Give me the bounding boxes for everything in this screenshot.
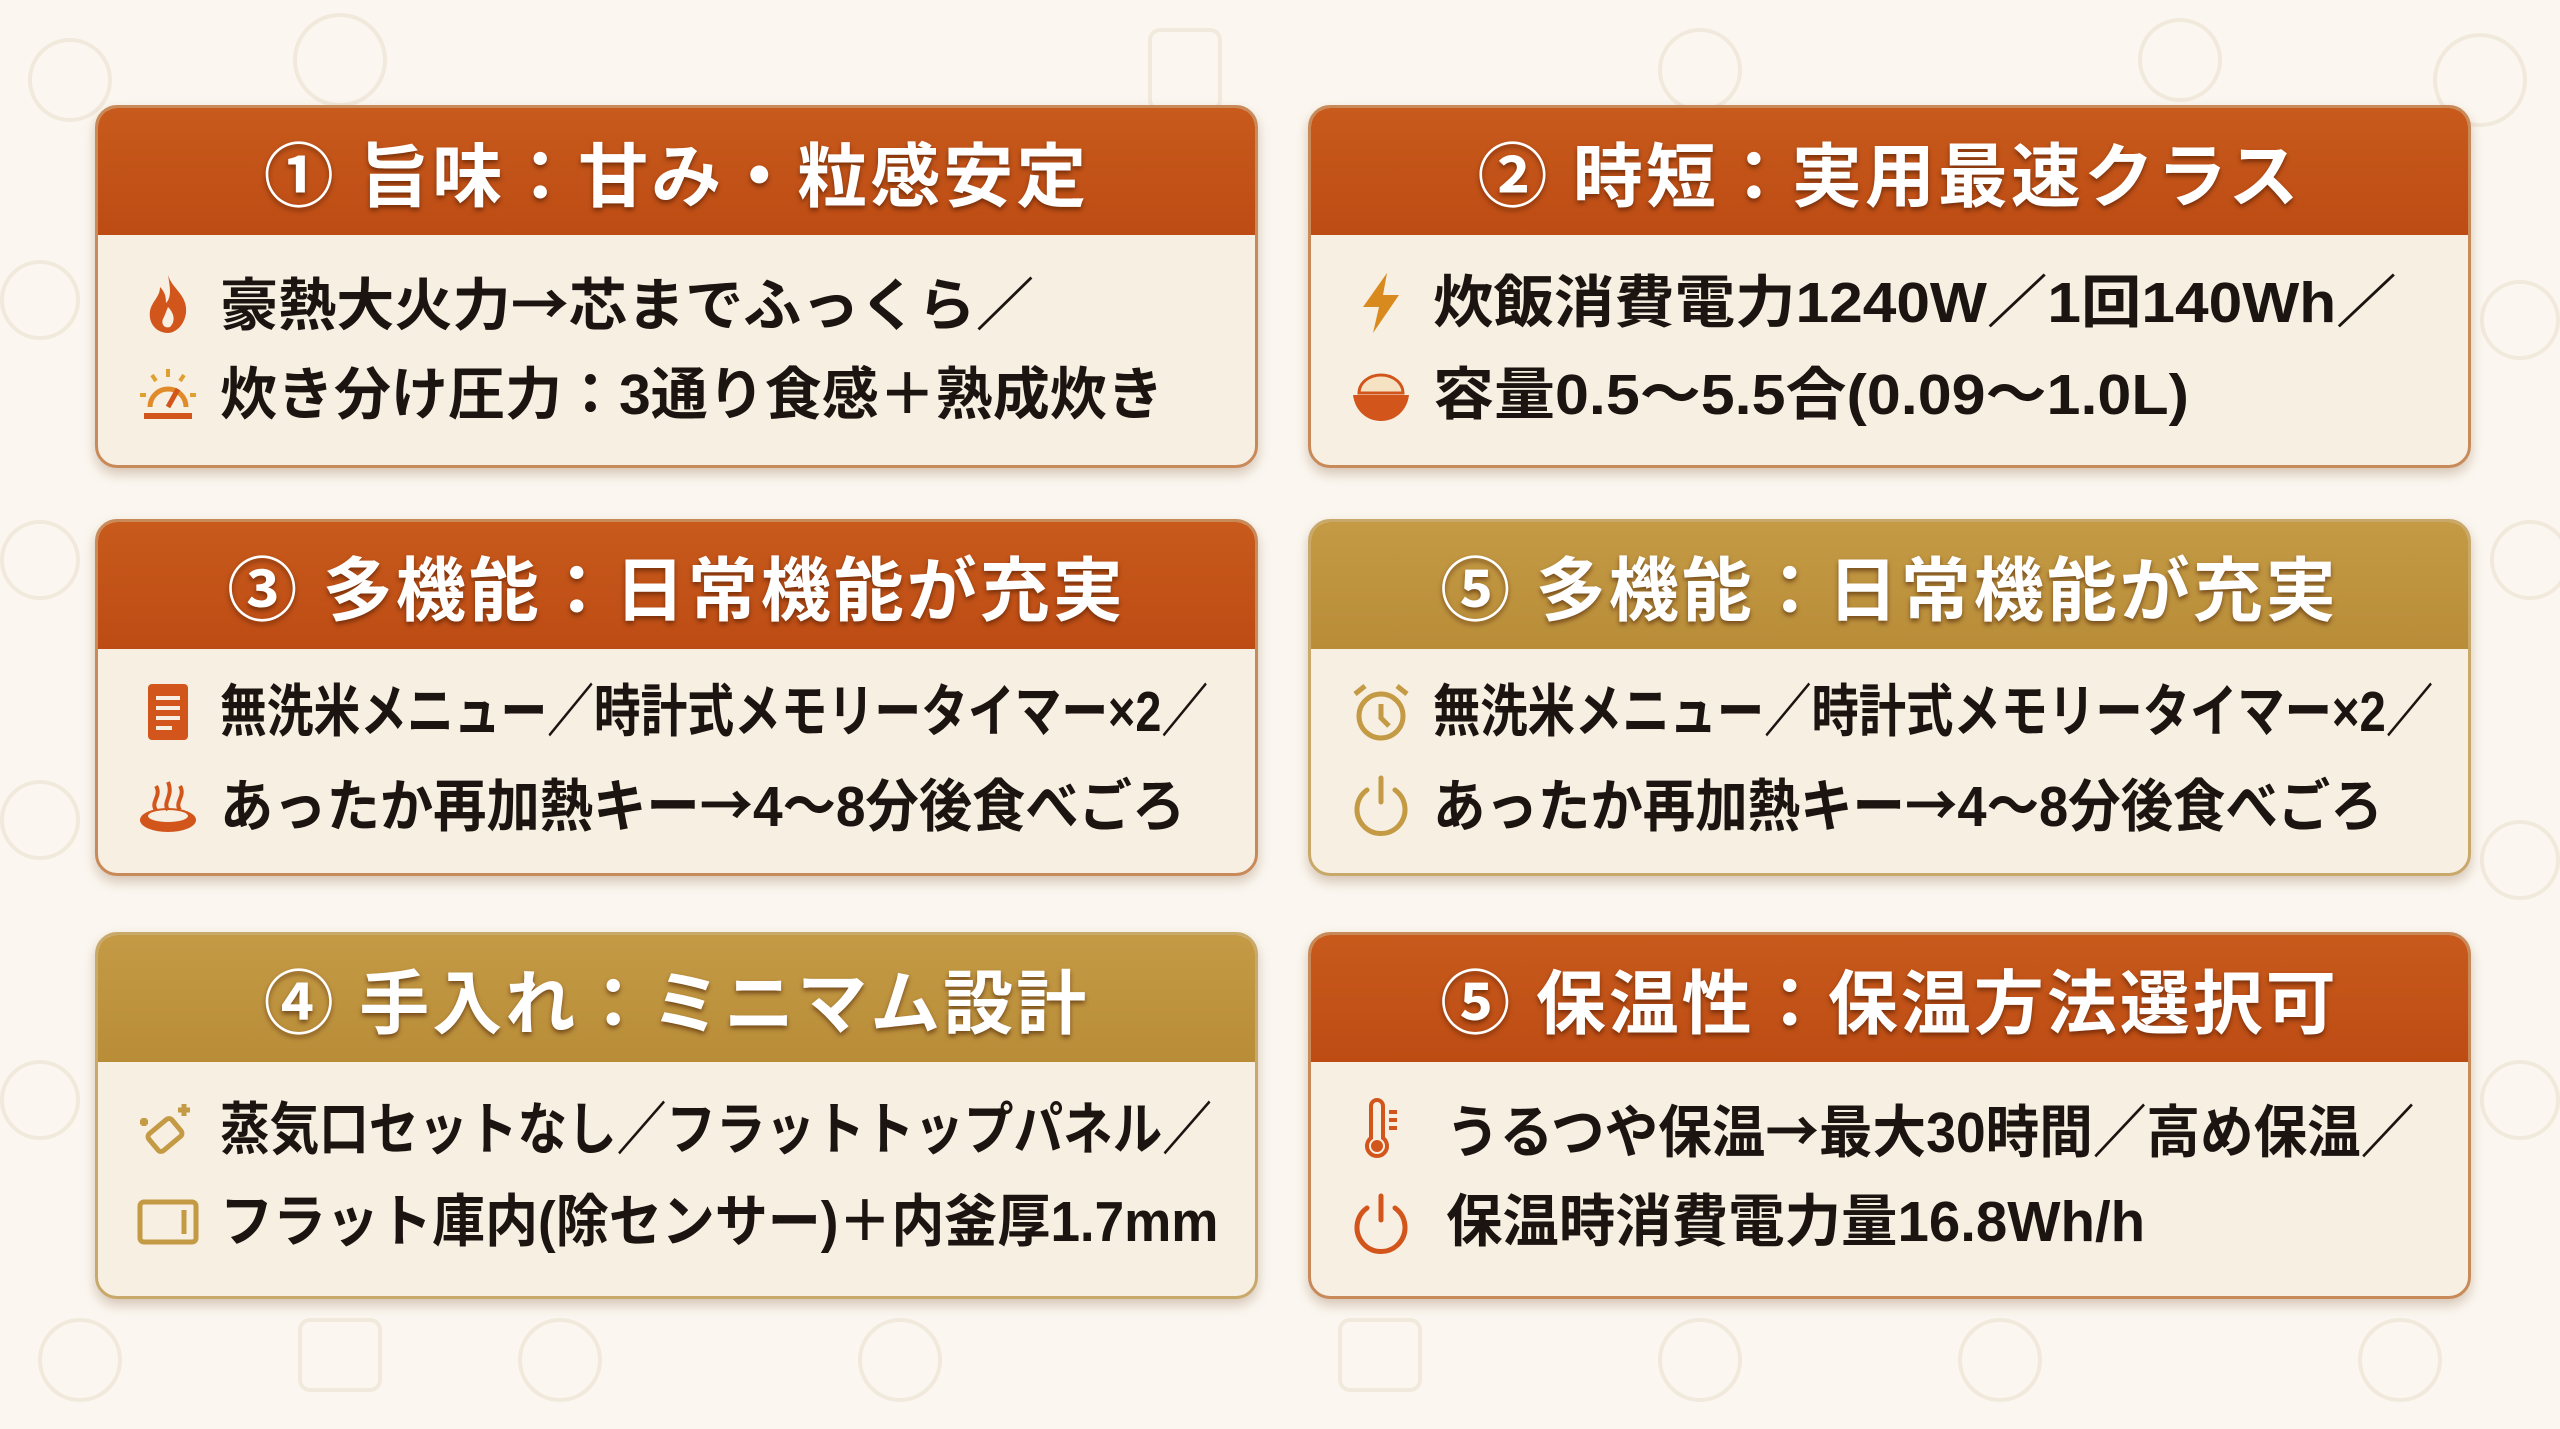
line 4-1: 無洗米メニュー／時計式メモリータイマー×2／ xyxy=(1433,680,2433,744)
line 5-2: フラット庫内(除センサー)＋内釜厚1.7mm xyxy=(220,1190,1218,1254)
panel 2 xyxy=(1308,105,2471,468)
line 3-1: 無洗米メニュー／時計式メモリータイマー×2／ xyxy=(220,680,1208,744)
line 2-2: 容量0.5～5.5合(0.09～1.0L) xyxy=(1433,363,2189,427)
heading 4: ⑤ 多機能：日常機能が充実 xyxy=(1440,552,2339,630)
panel 6 xyxy=(1308,932,2471,1299)
panel 3 xyxy=(95,519,1258,876)
line 1-1: 豪熱大火力→芯までふっくら／ xyxy=(220,260,1034,342)
heading 6 xyxy=(1311,935,2468,1062)
line 5-1: 蒸気口セットなし／フラットトップパネル／ xyxy=(220,1098,1212,1162)
heading 4 xyxy=(1311,522,2468,649)
heading 5 xyxy=(98,935,1255,1062)
line 3-2: あったか再加熱キー→4～8分後食べごろ xyxy=(220,760,1185,842)
heading 1: ① 旨味：甘み・粒感安定 xyxy=(264,138,1089,216)
heading 2 xyxy=(1311,108,2468,235)
line 6-1: うるつや保温→最大30時間／高め保温／ xyxy=(1446,1086,2414,1168)
heading 6: ⑤ 保温性：保温方法選択可 xyxy=(1440,965,2339,1043)
panel 1 xyxy=(95,105,1258,468)
line 4-2: あったか再加熱キー→4～8分後食べごろ xyxy=(1433,760,2383,842)
panel 5 xyxy=(95,932,1258,1299)
heading 2: ② 時短：実用最速クラス xyxy=(1477,138,2302,216)
line 2-1: 炊飯消費電力1240W／1回140Wh／ xyxy=(1433,271,2397,335)
heading 3 xyxy=(98,522,1255,649)
line 1-2: 炊き分け圧力：3通り食感＋熟成炊き xyxy=(220,363,1164,427)
heading 3: ③ 多機能：日常機能が充実 xyxy=(227,552,1126,630)
panel 4 xyxy=(1308,519,2471,876)
line 6-2: 保温時消費電力量16.8Wh/h xyxy=(1446,1190,2145,1254)
heading 5: ④ 手入れ：ミニマム設計 xyxy=(264,965,1089,1043)
heading 1 xyxy=(98,108,1255,235)
